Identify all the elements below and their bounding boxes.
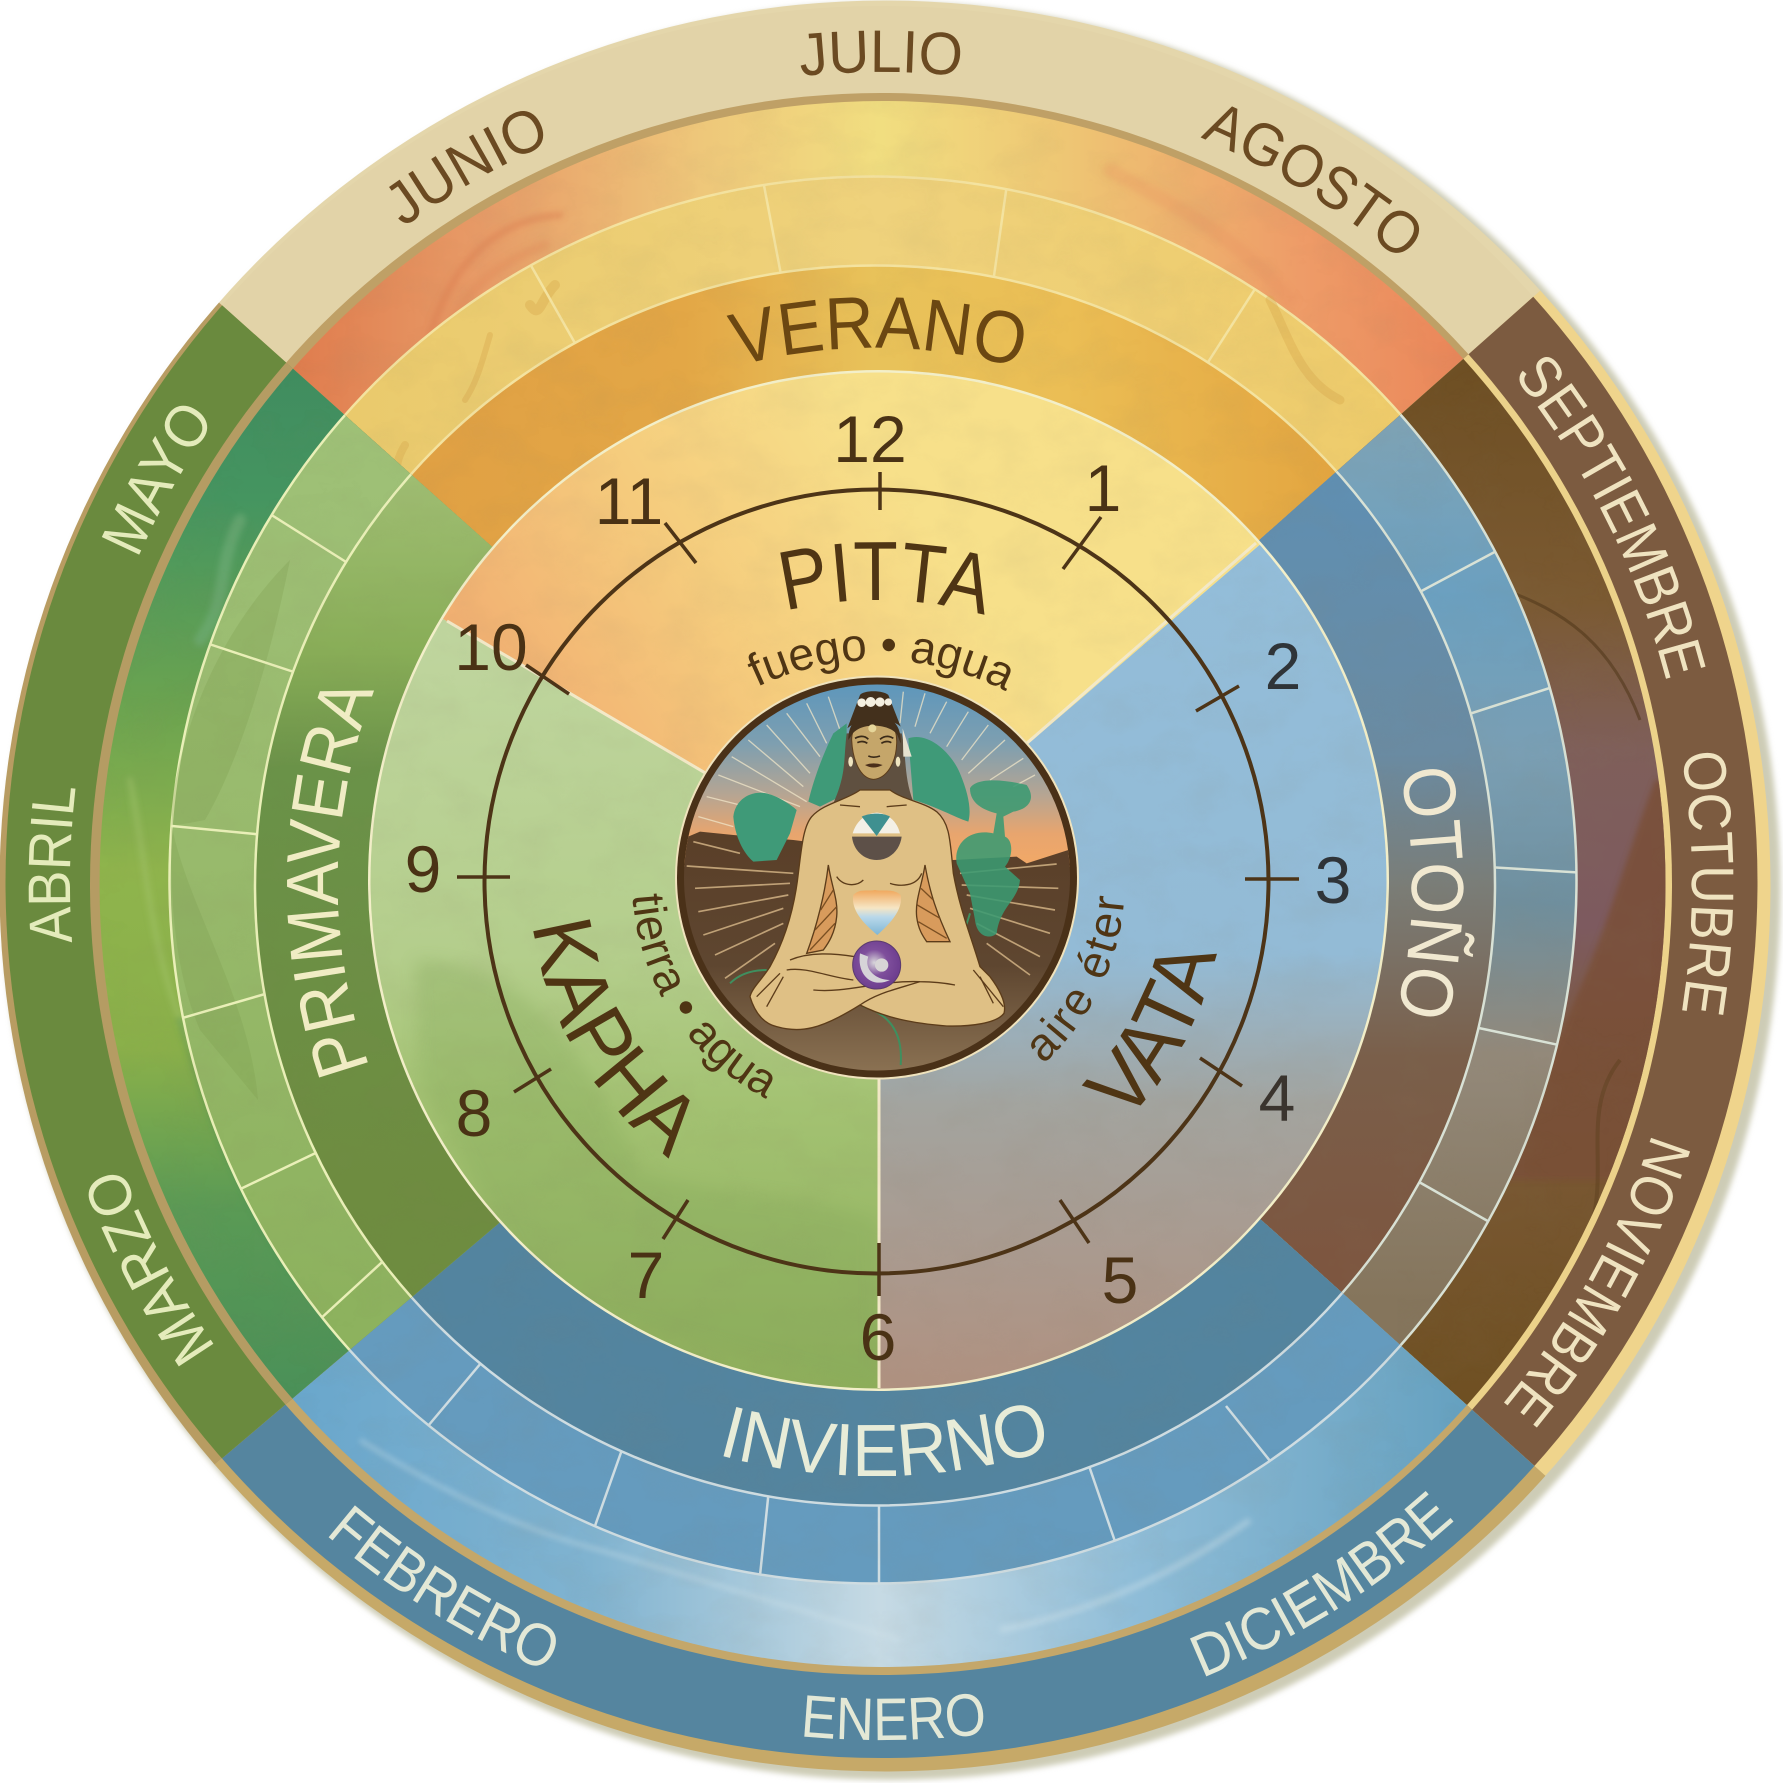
label: autumn months [1487,333,1746,1446]
clock numbers: 10 [454,610,528,684]
sector: vata [370,372,1386,1388]
arm shading and torso lines [757,805,1003,1007]
panel: winter sector [214,1219,1546,1772]
ring: summer season band [410,264,1337,547]
label: autumn months: NOVIEMBRE [1504,1138,1690,1428]
chakra top [852,813,902,860]
label: summer months: JULIO [800,30,960,76]
leaves and stem [730,913,970,1065]
panel: dosha disc [368,370,1389,1391]
clock numbers: 1 [1085,451,1121,525]
trees [733,723,1031,937]
label: otoño: OTOÑO [1381,759,1481,1027]
label: winter months: DICIEMBRE [1190,1491,1454,1676]
decoration: summer wisps [430,170,1290,335]
wing stripes [810,888,947,950]
chakra bottom [853,941,901,989]
sky [660,660,1120,867]
clock ticks [457,472,1299,1296]
panel: autumn sector [1259,290,1770,1476]
decoration: spring mid-ring shapes [171,560,290,1100]
label: spring months: ABRIL [14,781,89,947]
sector: kapha [370,372,1386,1388]
ring: autumn landscape [1260,359,1666,1405]
label: summer months [370,18,1441,276]
label: autumn months: SEPTIEMBRE [1520,357,1706,679]
ring: autumn season band [1259,470,1496,1294]
clock numbers: 4 [1259,1061,1295,1135]
label: summer months: JUNIO [389,111,544,223]
decoration: summer mid-ring shapes [397,285,1340,484]
season labels [268,279,1481,1495]
ring: spring landscape [100,101,1666,1667]
cell dividers: spring [162,509,392,1321]
ring: autumn months band [1262,296,1758,1466]
sky rays [698,692,1035,827]
head [847,691,912,779]
sector: pitta [370,372,1386,1388]
label: verano: VERANO [722,279,1035,383]
ring: summer landscape [293,101,1463,414]
ring: winter months band [222,1345,1534,1758]
dosha dividers [447,543,1256,1388]
ring: spring season band [255,266,1495,1506]
ground rays [687,842,1058,978]
cell dividers: winter [428,1350,1287,1593]
label: kapha elements: tierra • agua [594,870,800,1126]
chakra middle [853,890,901,935]
clock numbers: 3 [1315,843,1351,917]
decoration: kapha wash [415,960,876,1388]
medallion: meditating figure [660,660,1120,1080]
label: summer months: AGOSTO [1200,106,1420,253]
ring: winter season band [255,266,1495,1506]
label: primavera: PRIMAVERA [268,668,390,1088]
label: spring months: MARZO [65,1156,230,1380]
label: spring months: MAYO [85,388,228,568]
side wings [807,865,837,953]
label: kapha: KAPHA [491,883,734,1186]
label: winter months [312,1474,1471,1754]
clock numbers: 8 [456,1076,492,1150]
clock numbers: 12 [833,402,907,476]
hair back [833,733,913,803]
cell dividers: summer [530,186,1255,362]
label: invierno: INVIERNO [712,1384,1057,1495]
body [750,790,1005,1030]
ground [673,832,1093,1080]
label: winter months: ENERO [804,1694,984,1740]
decoration: spring wisps [130,520,300,1280]
clock numbers: 6 [860,1300,896,1374]
label: vata: VATA [1058,915,1247,1142]
ring: winter landscape [100,101,1666,1667]
label: spring months [14,388,230,1380]
clock numbers: 7 [628,1238,664,1312]
clock dial [457,472,1299,1296]
clock numbers [405,402,1351,1374]
label: vata elements: aire éter [1006,877,1151,1079]
clock numbers: 5 [1102,1243,1138,1317]
decoration: winter wisps [360,1440,1250,1640]
label: pitta elements: fuego • agua [739,615,1024,701]
panel: summer sector [219,0,1540,547]
decoration: autumn wisps [1516,593,1666,1216]
texture overlay [100,100,1666,1668]
clock numbers: 2 [1265,629,1301,703]
clock numbers: 9 [405,832,441,906]
label: pitta: PITTA [769,521,1002,633]
label: winter months: FEBRERO [328,1505,556,1666]
cell dividers: autumn [1420,551,1576,1222]
label: autumn months: OCTUBRE [1682,752,1734,1015]
clock numbers: 11 [595,464,663,538]
dosha labels [491,521,1247,1186]
